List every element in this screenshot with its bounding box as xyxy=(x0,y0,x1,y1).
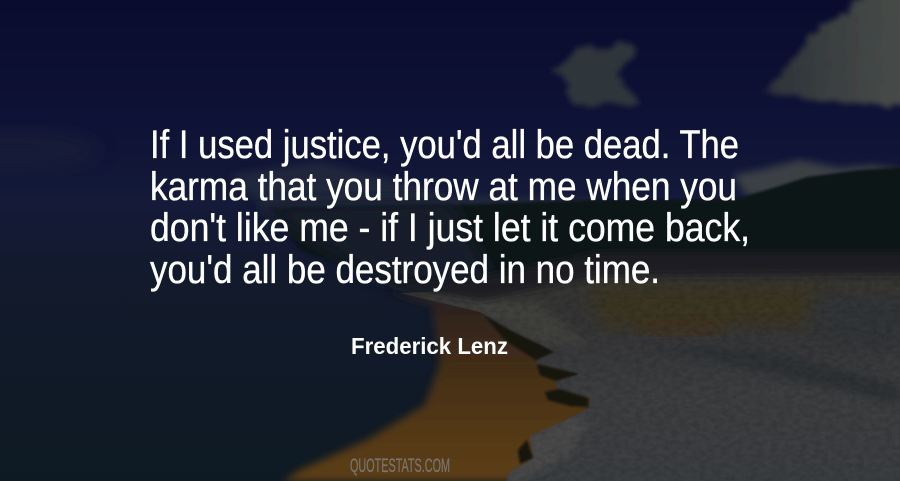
white salt ground xyxy=(395,255,900,481)
quote text xyxy=(150,123,750,292)
author name: Frederick Lenz xyxy=(351,333,508,359)
quote text: don't like me - if I just let it come back, xyxy=(150,206,750,250)
watermark: QUOTESTATS.COM xyxy=(350,456,450,477)
hills right xyxy=(270,167,900,285)
grey band right xyxy=(806,304,836,327)
far horizon haze xyxy=(230,162,600,220)
cloud: small xyxy=(552,43,638,107)
white lip xyxy=(510,420,585,480)
quote text: you'd all be destroyed in no time. xyxy=(150,248,660,292)
reddish streak xyxy=(640,318,720,335)
cloud: large top right xyxy=(763,0,900,105)
mist at hill foot xyxy=(380,252,900,300)
quote text: karma that you throw at me when you xyxy=(150,165,737,209)
shadow ripple xyxy=(688,350,900,404)
cloud: low bank behind hills xyxy=(733,160,900,200)
dark shore notches xyxy=(485,316,588,464)
orange shoreline xyxy=(283,290,600,481)
quote text: If I used justice, you'd all be dead. The xyxy=(150,123,739,167)
olive band xyxy=(590,285,830,330)
